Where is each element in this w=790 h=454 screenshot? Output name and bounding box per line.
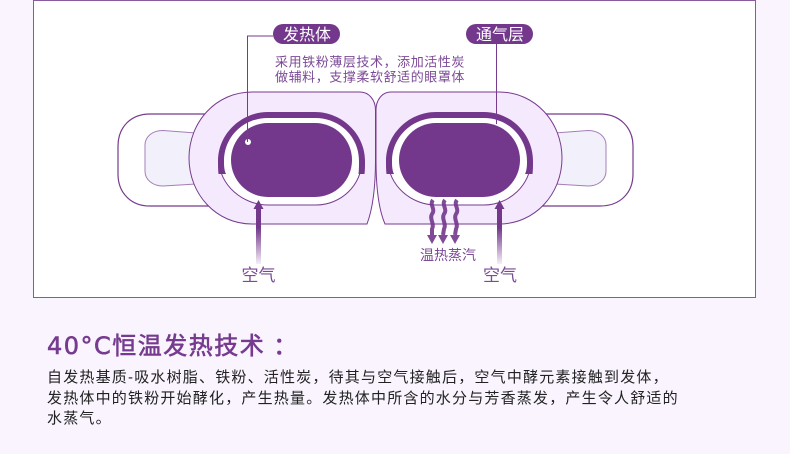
label: left air: 空气 [242,266,276,285]
left shell [189,92,376,224]
body text [47,366,679,427]
left strap [118,114,215,206]
arrow: left air [254,200,264,264]
label: 发热体 [248,24,340,142]
body text: 水蒸气。 [47,410,112,427]
description text: 做辅料，支撑柔软舒适的眼罩体 [275,66,465,86]
description text [275,52,465,86]
body text: 发热体中的铁粉开始酵化，产生热量。发热体中所含的水分与芳香蒸发，产生令人舒适的 [47,386,679,408]
panel: diagram frame [33,0,756,298]
label: 发热体: 发热体 [283,26,331,44]
description text: 采用铁粉薄层技术，添加活性炭 [275,52,465,70]
right shell [376,92,562,224]
label: 温热蒸汽: 温热蒸汽 [420,247,476,263]
heading: 40°C恒温发热技术 ： [47,326,299,361]
right strap [540,114,633,206]
diagram: eye mask cross-section [117,24,634,285]
label: 通气层: 通气层 [476,26,524,44]
arrow: right air [494,200,504,264]
label: 通气层 [466,24,533,124]
label: right air: 空气 [483,266,517,285]
arrows: warm steam [427,200,460,244]
body text: 自发热基质-吸水树脂、铁粉、活性炭，待其与空气接触后，空气中酵元素接触到发体， [47,366,669,387]
left heating element [218,112,365,205]
right ventilation layer [386,112,533,205]
